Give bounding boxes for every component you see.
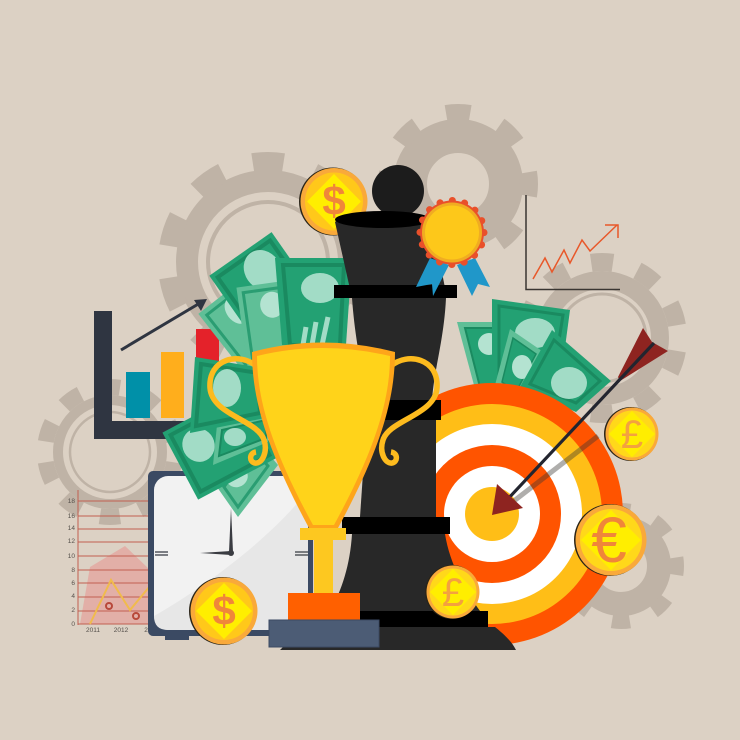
mini line chart <box>526 195 620 290</box>
arrow in target <box>492 328 668 515</box>
lower body <box>330 534 480 611</box>
yellow trend line <box>90 580 150 624</box>
left handle <box>210 359 265 463</box>
fletching <box>618 328 668 381</box>
rosette <box>420 200 484 264</box>
bill left <box>457 322 520 400</box>
year labels <box>86 627 148 634</box>
coin: pound bottom: £ <box>442 571 464 615</box>
year labels: 2011 <box>86 627 100 634</box>
collar band <box>334 285 457 298</box>
trophy <box>210 342 437 647</box>
upper body <box>352 298 446 400</box>
bill front <box>520 330 611 412</box>
bar chart with arrow <box>94 299 219 439</box>
clock case <box>148 471 313 636</box>
chess king <box>280 165 516 650</box>
coin: dollar top <box>299 168 368 236</box>
axis labels: 14 <box>68 525 75 532</box>
line chart with year axis <box>68 490 150 634</box>
base band <box>328 611 488 627</box>
coin: dollar top: $ <box>322 177 346 224</box>
clock <box>148 471 313 640</box>
axis labels: 18 <box>68 498 75 505</box>
data markers <box>106 603 139 619</box>
gear: top right <box>387 113 529 255</box>
rising arrow <box>121 299 207 350</box>
arrow shadow <box>510 436 598 504</box>
coin: pound right <box>604 407 658 461</box>
money: top cluster <box>198 232 352 385</box>
mid body <box>360 400 436 517</box>
orange bar <box>161 352 184 418</box>
hub <box>228 550 234 556</box>
coin: euro <box>574 504 646 576</box>
coin: pound right: £ <box>621 413 643 457</box>
stem <box>314 540 333 595</box>
bill mid <box>213 415 268 465</box>
hour hand <box>200 551 231 555</box>
medal <box>416 200 490 296</box>
axis labels: 8 <box>71 567 75 574</box>
minute hand <box>229 508 233 552</box>
bill mid <box>495 329 542 400</box>
bill light back <box>198 267 314 385</box>
bill front <box>275 258 352 345</box>
bill light mid <box>236 279 308 371</box>
arrow head <box>492 484 523 515</box>
target <box>361 383 623 645</box>
cup <box>257 348 390 525</box>
axis labels <box>68 498 75 628</box>
axis labels: 0 <box>71 621 75 628</box>
money: left cluster <box>162 357 278 517</box>
left ribbon <box>416 258 449 296</box>
pink area <box>80 546 150 624</box>
collar <box>300 528 346 540</box>
king head <box>372 165 424 217</box>
coin: dollar bottom <box>189 577 258 645</box>
axis labels: 16 <box>68 513 75 520</box>
shaft <box>505 343 654 502</box>
king foot <box>280 627 516 650</box>
axis labels: 2 <box>71 607 75 614</box>
right handle <box>382 359 437 463</box>
bill lower back <box>217 438 278 517</box>
clock face <box>154 476 308 630</box>
medal disc <box>422 202 482 262</box>
axis labels: 6 <box>71 580 75 587</box>
teal bar <box>126 372 150 418</box>
gear: large left <box>168 162 368 362</box>
bill top <box>190 357 265 433</box>
mid band <box>362 400 441 420</box>
red bar <box>196 329 219 369</box>
gear: right middle <box>526 262 678 414</box>
right ribbon <box>457 258 490 296</box>
chart axes <box>94 311 205 439</box>
axis labels: 10 <box>68 553 75 560</box>
year labels: 2 <box>144 627 148 634</box>
money: right cluster <box>457 299 611 412</box>
gear: bottom right <box>565 510 677 622</box>
cup border <box>252 342 395 528</box>
gear: small left <box>45 387 175 517</box>
year labels: 2012 <box>114 627 129 634</box>
lower band <box>342 517 450 534</box>
bill left <box>162 390 278 500</box>
coin: euro: € <box>591 504 627 576</box>
king crown <box>335 212 447 298</box>
orange plinth <box>288 593 360 621</box>
axis labels: 4 <box>71 593 75 600</box>
axis labels: 12 <box>68 538 75 545</box>
slate base <box>269 620 379 647</box>
bill back <box>492 299 570 385</box>
hour ticks <box>155 552 308 555</box>
coin: dollar bottom: $ <box>212 587 236 634</box>
clock foot <box>165 632 189 640</box>
grid lines <box>78 490 150 625</box>
coin: pound bottom <box>425 565 480 619</box>
bill dark back <box>209 232 335 366</box>
